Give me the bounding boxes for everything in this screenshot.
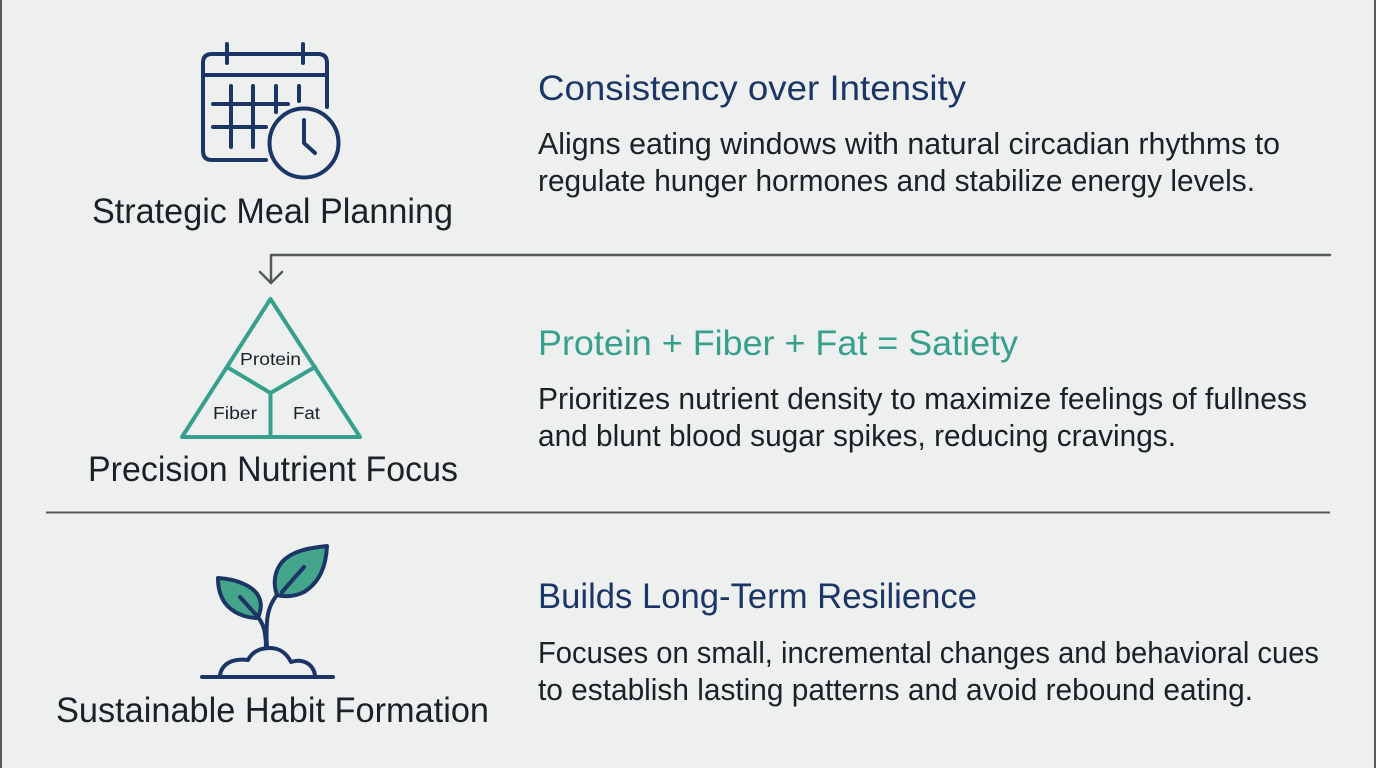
text block: nutrient density: Prioritizes nutrient density to maximize feelings of fullness	[538, 381, 1307, 416]
text block: circadian rhythms: Aligns eating windows with natural circadian rhythms to	[538, 126, 1280, 161]
text block: incremental changes: to establish lasting patterns and avoid rebound eating.	[538, 672, 1253, 707]
heading: consistency over intensity: Consistency over Intensity	[538, 69, 967, 108]
panel: strategic meal planning	[92, 44, 1280, 231]
label: sustainable habit formation: Sustainable Habit Formation	[56, 691, 489, 730]
panel: sustainable habit formation	[56, 546, 1319, 730]
icon: sprout	[202, 546, 333, 677]
heading: satiety formula: Protein + Fiber + Fat = Satiety	[538, 324, 1019, 363]
text block: nutrient density	[538, 381, 1307, 453]
panel: precision nutrient focus	[88, 299, 1307, 489]
icon: calendar with clock	[203, 44, 338, 178]
icon: nutrient triangle: Protein	[240, 349, 301, 369]
label: strategic meal planning: Strategic Meal Planning	[92, 192, 453, 231]
divider line	[46, 512, 1330, 514]
text block: nutrient density: and blunt blood sugar spikes, reducing cravings.	[538, 418, 1176, 453]
text block: incremental changes	[538, 635, 1319, 707]
icon: nutrient triangle: Fat	[293, 403, 320, 423]
label: precision nutrient focus: Precision Nutrient Focus	[88, 450, 458, 489]
icon: nutrient triangle: Fiber	[213, 403, 257, 423]
text block: circadian rhythms: regulate hunger hormones and stabilize energy levels.	[538, 163, 1255, 198]
text block: circadian rhythms	[538, 126, 1280, 198]
icon: nutrient triangle	[182, 299, 360, 437]
text block: incremental changes: Focuses on small, incremental changes and behavioral cues	[538, 635, 1319, 670]
heading: long-term resilience: Builds Long-Term Resilience	[538, 577, 977, 616]
arrow: connector to nutrient focus	[260, 255, 1330, 283]
